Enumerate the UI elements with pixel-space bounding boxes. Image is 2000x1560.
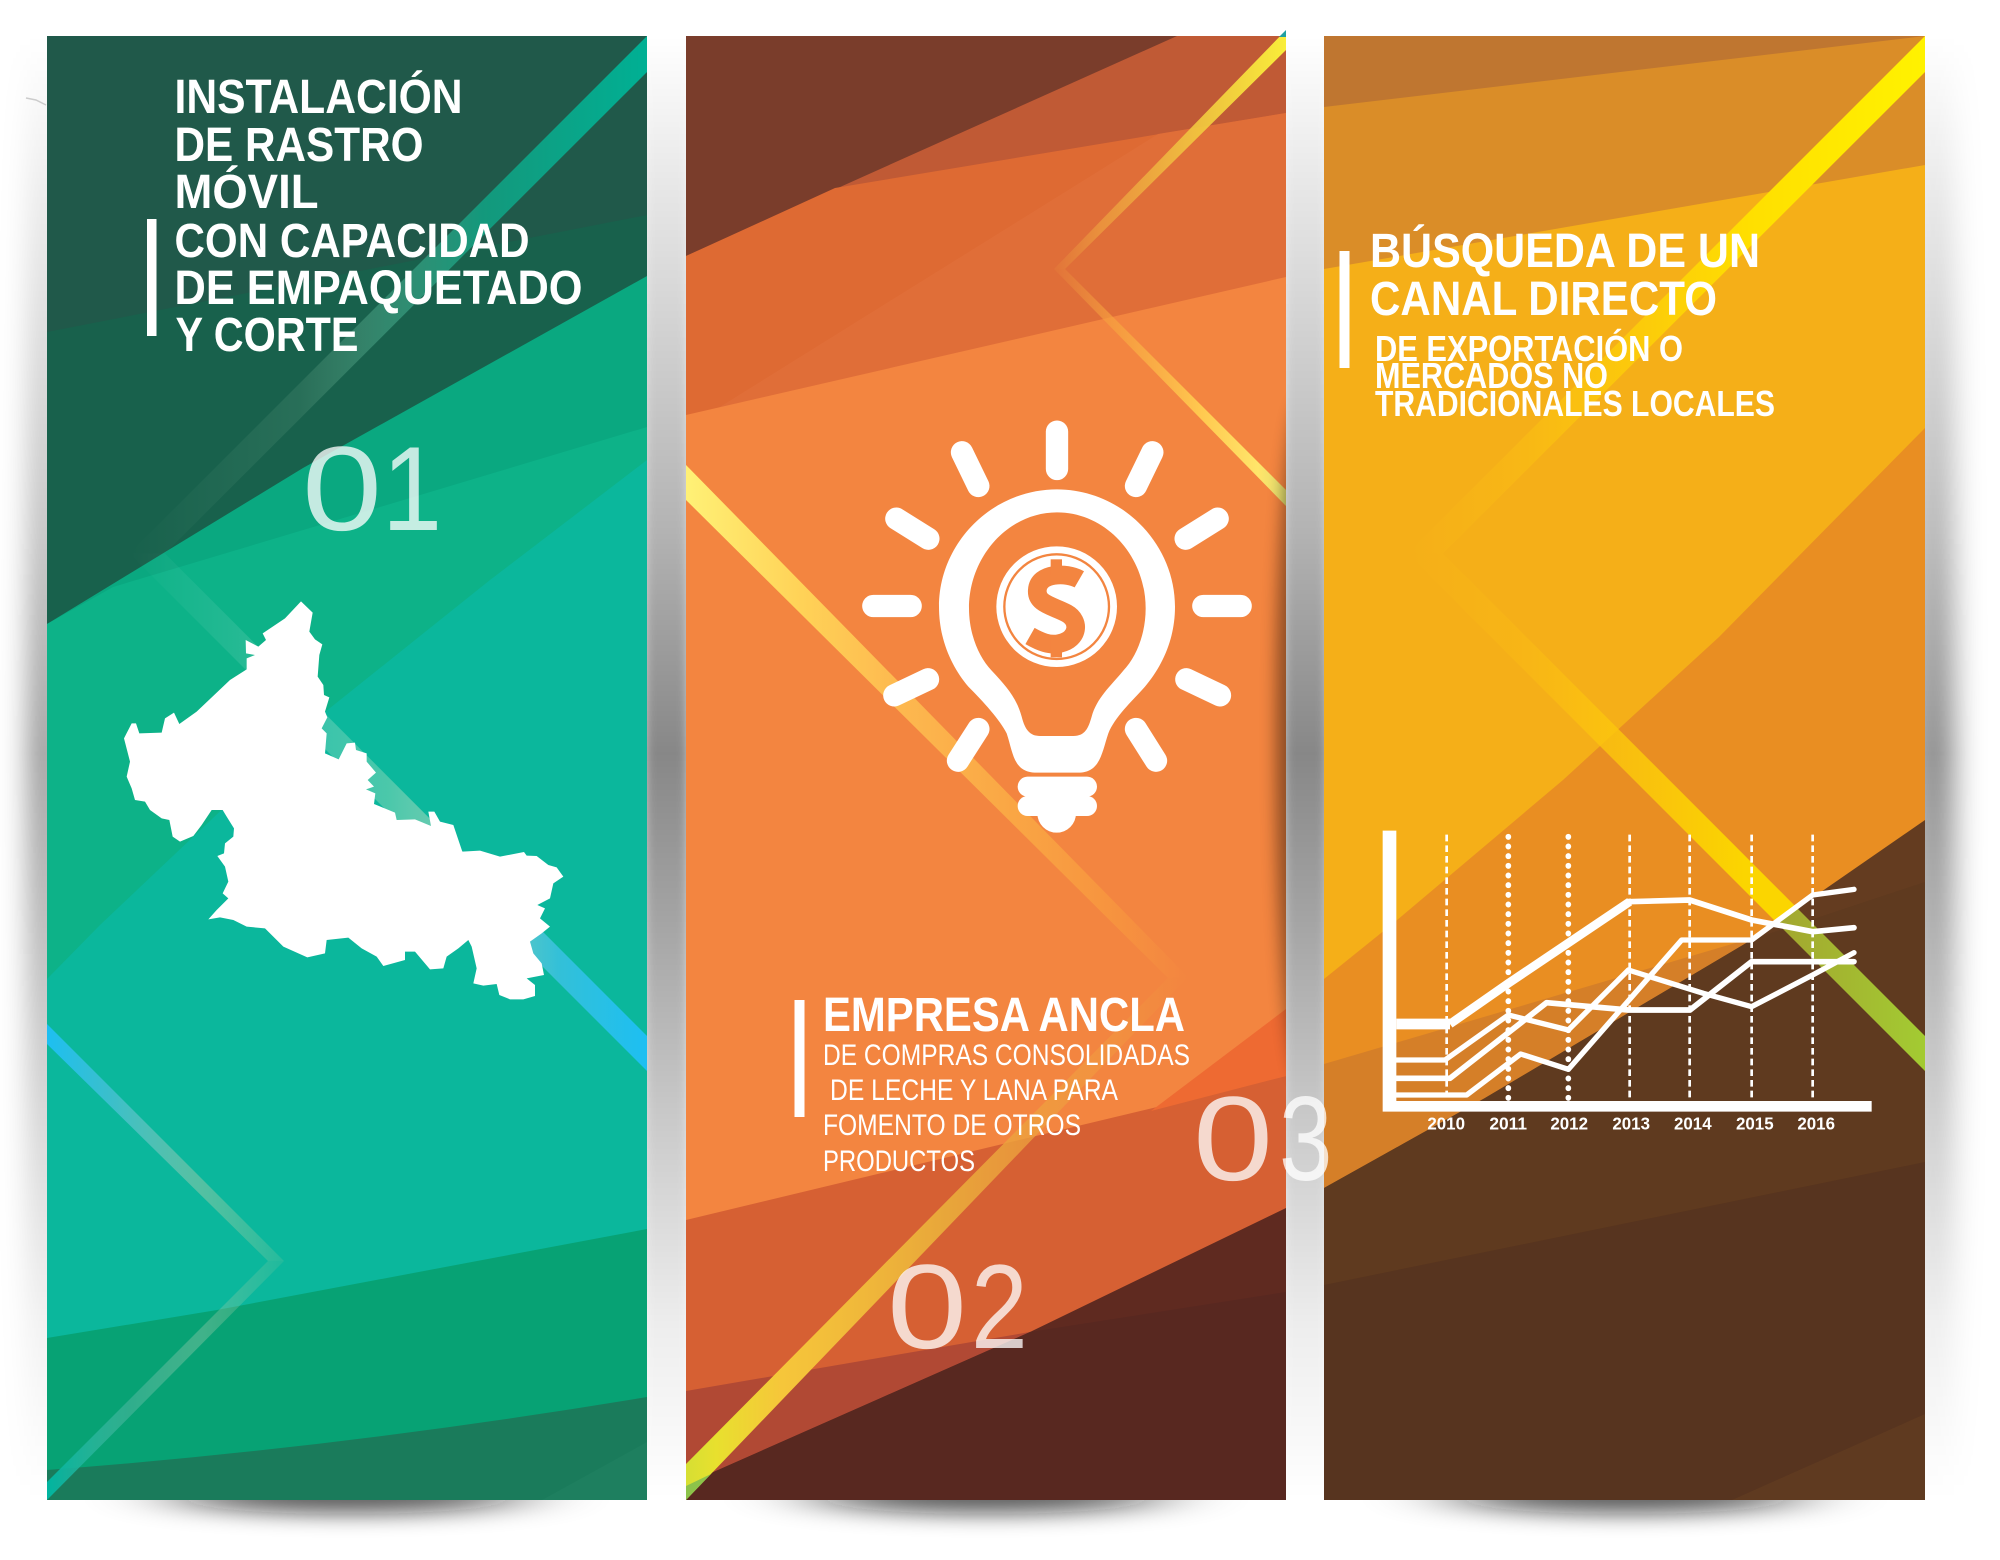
text block 02: FOMENTO DE OTROS — [823, 1109, 1081, 1142]
icon: light bulb with dollar coin — [873, 432, 1241, 833]
chart year labels: 2016 — [1797, 1113, 1835, 1133]
chart year labels: 2015 — [1736, 1113, 1774, 1133]
icon: state map — [124, 601, 563, 999]
chart grid lines — [1447, 835, 1813, 1101]
text block 03 — [1375, 327, 1775, 424]
text block 02: DE LECHE Y LANA PARA — [830, 1074, 1118, 1107]
title 01 — [174, 69, 582, 362]
text block 03: TRADICIONALES LOCALES — [1375, 383, 1775, 424]
accent bar 01 — [147, 219, 156, 336]
panel: 03 amber — [1324, 36, 1925, 1500]
chart year labels: 2014 — [1674, 1113, 1712, 1133]
panel: 01 green — [47, 36, 647, 1500]
chart axes — [1383, 831, 1872, 1112]
title 01: CON CAPACIDAD — [174, 215, 530, 268]
title 03 — [1370, 223, 1760, 326]
title 01: DE RASTRO — [174, 119, 424, 172]
number 03: 3 — [1279, 1073, 1332, 1207]
title 03: BÚSQUEDA DE UN — [1370, 223, 1760, 278]
title 01: DE EMPAQUETADO — [174, 262, 582, 315]
text block 02 — [823, 1039, 1190, 1178]
chart year labels: 2012 — [1550, 1113, 1588, 1133]
chart year labels: 2010 — [1427, 1113, 1465, 1133]
title 01: INSTALACIÓN — [174, 69, 462, 124]
number 01 — [302, 422, 442, 556]
title 01: MÓVIL — [174, 164, 318, 219]
number 03: 0 — [1193, 1072, 1273, 1206]
panel 01 background bands — [47, 36, 647, 1500]
panel: 02 orange — [686, 30, 1328, 1500]
accent bar 03 — [1340, 251, 1350, 368]
chart data lines — [1396, 889, 1854, 1095]
title 02: EMPRESA ANCLA — [823, 989, 1185, 1042]
number 02: 0 — [887, 1240, 967, 1374]
title 01: Y CORTE — [176, 309, 358, 362]
text block 03: MERCADOS NO — [1375, 355, 1608, 396]
number 01: 0 — [302, 422, 382, 556]
number 02 — [887, 1239, 1028, 1374]
chart year labels: 2013 — [1612, 1113, 1650, 1133]
panel 03 background bands — [1324, 36, 1925, 1500]
number 03 — [1193, 1072, 1332, 1207]
text block 02: PRODUCTOS — [823, 1145, 975, 1178]
title 03: CANAL DIRECTO — [1370, 273, 1717, 326]
text block 02: DE COMPRAS CONSOLIDADAS — [823, 1039, 1190, 1072]
panel 02 background bands — [686, 30, 1328, 1500]
chart year labels: 2011 — [1489, 1113, 1527, 1133]
text block 03: DE EXPORTACIÓN O — [1375, 327, 1683, 369]
accent bar 02 — [794, 1000, 804, 1117]
line chart — [1383, 831, 1872, 1133]
number 01: 1 — [382, 423, 442, 556]
chart year labels — [1427, 1113, 1835, 1133]
number 02: 2 — [971, 1239, 1028, 1374]
